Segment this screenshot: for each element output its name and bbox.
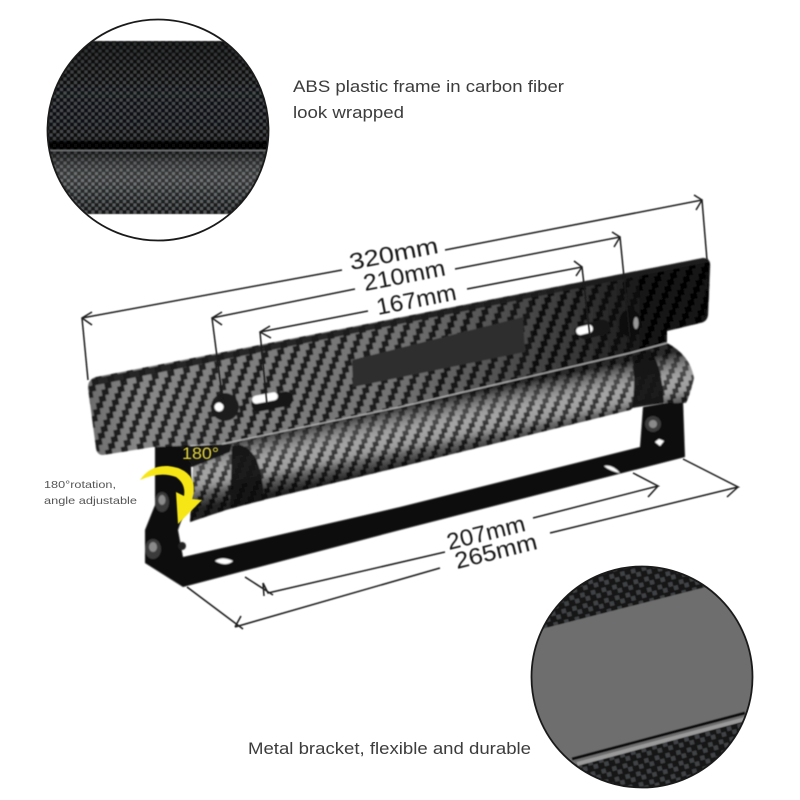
- 207mm dimension: [245, 473, 658, 596]
- product: license plate frame: [88, 258, 710, 587]
- caption: ABS frame: look wrapped: [293, 104, 404, 122]
- center label recess: [352, 317, 525, 387]
- bracket slots: [215, 439, 664, 564]
- detail circle: carbon fiber frame: [40, 20, 280, 240]
- plate top bevel: [92, 258, 709, 386]
- caption: metal bracket: Metal bracket, flexible and durable: [248, 740, 531, 758]
- dimension lines: upper: [82, 195, 738, 629]
- dimension labels: 265mm: [452, 528, 540, 574]
- caption: rotation: 180°rotation,: [44, 479, 116, 491]
- tube: [180, 343, 694, 522]
- right hole: [619, 309, 641, 337]
- left hole: [211, 393, 239, 421]
- caption: ABS frame: [293, 78, 565, 122]
- bracket bolts: [145, 416, 661, 559]
- 210mm dimension: [212, 232, 630, 403]
- tube notches: [178, 350, 664, 508]
- right slot: [575, 318, 611, 341]
- lower bracket: [145, 400, 685, 587]
- dimension labels: [347, 232, 540, 574]
- dimension labels: 320mm: [347, 232, 440, 275]
- 320mm dimension: [82, 195, 707, 380]
- dimension labels: 207mm: [444, 510, 528, 555]
- rotation arrow: [140, 444, 219, 524]
- 265mm dimension: [187, 459, 738, 629]
- caption: rotation: angle adjustable: [44, 495, 137, 507]
- caption: ABS frame: ABS plastic frame in carbon fiber: [293, 78, 565, 96]
- dimension labels: 167mm: [374, 279, 458, 320]
- dimension labels: 210mm: [361, 255, 447, 296]
- rotation angle label: 180°: [182, 444, 219, 463]
- detail circle: metal bracket: [530, 566, 754, 788]
- left slot: [250, 390, 294, 413]
- crease highlight: [222, 343, 667, 444]
- 167mm dimension: [260, 261, 590, 405]
- plate: [88, 258, 710, 455]
- caption: rotation: [44, 479, 137, 507]
